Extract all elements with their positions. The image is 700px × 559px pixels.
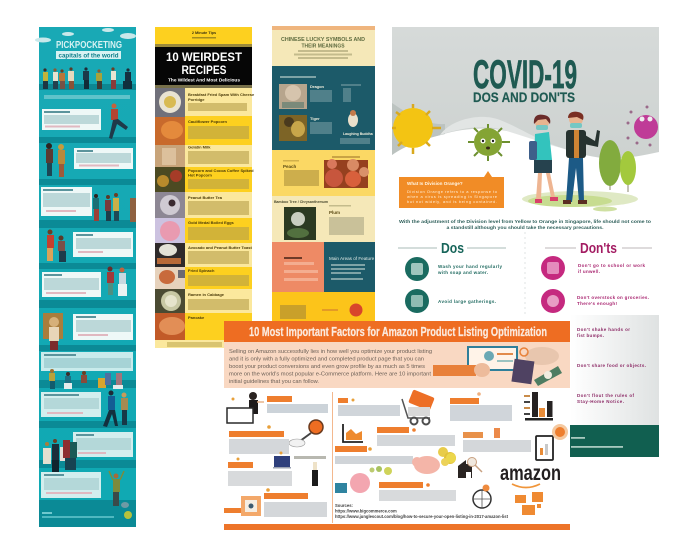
text: groceries: There's enough! xyxy=(577,301,618,306)
card 8 xyxy=(41,392,101,417)
illustration: trees xyxy=(599,140,636,192)
text: avoid gatherings: Avoid large gatherings. xyxy=(438,299,496,304)
figure: pair xyxy=(107,266,127,296)
factor: sales xyxy=(379,482,456,501)
text: groceries: Don't overstock on groceries. xyxy=(577,295,649,300)
text: fist bumps: Don't shake hands or xyxy=(577,327,630,332)
text: stay home: if unwell. xyxy=(578,269,600,274)
recipe headings: Gold Medal Boiled Eggs xyxy=(188,220,235,225)
text: stay-home notice xyxy=(577,393,634,404)
icon: green virus xyxy=(468,124,510,161)
photo: lucky figure xyxy=(348,110,358,127)
figure: couple xyxy=(46,143,65,177)
black title banner xyxy=(155,47,252,88)
factor: magnifier xyxy=(289,420,323,447)
clouds xyxy=(35,28,136,42)
heading: dos xyxy=(398,243,506,253)
icon: orange blocks xyxy=(515,492,543,515)
recipe headings: Cauliflower Popcorn xyxy=(188,119,227,124)
figure: boy xyxy=(563,112,600,204)
card 2 xyxy=(74,148,133,169)
title xyxy=(281,37,365,50)
section: plum: Plum xyxy=(329,210,340,215)
figure: crowd xyxy=(43,439,77,472)
section: plum: Bamboo Tree / Chrysanthemum xyxy=(274,200,328,204)
animal labels xyxy=(310,84,325,121)
text: stay home: Don't go to school or work xyxy=(578,263,645,268)
factor: woman at monitor xyxy=(227,392,328,423)
title: COVID-19: COVID-19 xyxy=(473,53,577,97)
animal labels: Dragon xyxy=(310,84,325,89)
photo: golden statue xyxy=(279,115,307,141)
panel: covid-19 infographic xyxy=(392,27,659,457)
title: THEIR MEANINGS xyxy=(302,44,345,50)
factor: description xyxy=(228,458,292,486)
text: wash hands: with soap and water. xyxy=(437,270,488,275)
text: wash hands: Wash your hand regularly xyxy=(438,264,502,269)
food photos xyxy=(155,88,185,340)
card 3 xyxy=(41,187,92,216)
factor: price xyxy=(338,398,400,416)
icon: shopping cart xyxy=(402,389,435,424)
intro block: boost your product conversions and even grow profile by as much as 5 times xyxy=(229,364,425,370)
title: CHINESE LUCKY SYMBOLS AND xyxy=(281,37,365,43)
factor: inventory xyxy=(335,446,413,464)
recipe headings: Fried Spinach xyxy=(188,268,215,273)
text: stay-home notice: Don't flout the rules of xyxy=(577,393,634,398)
card 10 xyxy=(41,472,101,498)
text: stay home xyxy=(578,264,645,273)
card 4 xyxy=(73,232,133,257)
callout: what is division orange: Division Orange refers to a response to xyxy=(407,189,498,194)
factor: image tile xyxy=(224,496,261,516)
panel: weirdest recipes infographic xyxy=(155,27,255,348)
photo: flowers xyxy=(284,207,316,240)
title: PICKPOCKETING xyxy=(56,40,122,51)
lucky figure label: Laughing Buddha xyxy=(343,132,373,136)
top band: 2 Minute Tips xyxy=(192,31,216,35)
icon: area chart xyxy=(343,424,363,442)
logo: amazon: amazon xyxy=(500,462,561,485)
top strip xyxy=(272,26,375,30)
figure: group xyxy=(93,193,136,222)
factor: description tag xyxy=(450,392,512,421)
icon: pink virus xyxy=(626,106,658,146)
text: wash hands xyxy=(437,264,502,275)
sources: https://www.bigcommerce.com xyxy=(335,508,397,514)
section: yellow footer xyxy=(272,292,375,322)
section: teal animals xyxy=(272,66,375,150)
recipe headings: Hot Popcorn xyxy=(188,172,213,178)
icon: avoid gatherings xyxy=(405,289,429,313)
section: teal panel: Main Areas of Feature xyxy=(329,256,375,261)
text: groceries xyxy=(577,295,649,306)
figure: victim arms raised xyxy=(109,471,129,508)
callout: what is division orange xyxy=(399,171,504,208)
recipe headings xyxy=(188,92,255,320)
photo: dragon statue xyxy=(279,84,307,109)
intro text xyxy=(294,50,352,59)
figure: two men xyxy=(103,390,128,427)
figure: girl xyxy=(529,115,558,203)
intro text xyxy=(44,95,130,99)
sources xyxy=(335,503,509,519)
callout: what is division orange: when a virus is spreading in Singapore xyxy=(407,194,498,199)
text: share food: Don't share food or objects. xyxy=(577,363,646,368)
section: plum xyxy=(274,200,364,240)
recipe headings: Gelatin Milk xyxy=(188,144,211,150)
black title banner: 10 WEIRDEST xyxy=(166,52,242,64)
icon: bar chart xyxy=(524,392,553,420)
sources: https://www.junglescout.com/blog/how-to-secure-your-open-listing-in-2017-amazon-list xyxy=(335,514,509,519)
icon: groceries xyxy=(541,289,565,313)
factor: keywords xyxy=(229,425,289,454)
card 6 xyxy=(73,314,133,340)
intro block: initial guidelines that you can follow. xyxy=(229,379,319,385)
intro text: a standstill although you should take the necessary precautions. xyxy=(446,225,604,230)
recipe headings: Popcorn and Cocoa Coffee Spiked xyxy=(188,168,254,173)
intro text: With the adjustment of the Division level from Yellow to Orange in Singapore, life should not come to xyxy=(399,219,651,224)
icon: globe with pin xyxy=(473,484,491,508)
illustration: analytics and money xyxy=(433,347,562,386)
section: teal panel xyxy=(324,242,375,292)
bottom bar xyxy=(224,524,570,530)
callout: what is division orange: but not widely, and is being contained. xyxy=(407,199,497,204)
icon: wash hands xyxy=(405,257,429,281)
recipe headings: Porridge xyxy=(188,97,205,102)
intro block xyxy=(224,342,570,388)
icon: orange gear xyxy=(552,424,568,440)
list: other animals xyxy=(341,84,361,102)
subtitle: capitals of the world xyxy=(58,54,119,60)
figures row xyxy=(49,369,123,389)
text: stay-home notice: Stay-Home Notice. xyxy=(577,399,624,404)
recipe body text xyxy=(188,103,249,310)
factor: competitive analysis xyxy=(377,427,455,446)
black title banner: RECIPES xyxy=(182,65,227,77)
intro text xyxy=(399,219,651,230)
icon: yellow coin xyxy=(446,453,456,463)
header people xyxy=(39,67,136,90)
footer note xyxy=(167,342,222,347)
recipe headings: Avocado and Peanut Butter Toast xyxy=(188,245,252,250)
factor: laptop xyxy=(273,452,291,468)
section: salmon list xyxy=(272,242,324,292)
heading: dos: Dos xyxy=(441,240,464,257)
text: fist bumps: fist bumps. xyxy=(577,333,604,338)
alternating recipe rows xyxy=(185,116,252,340)
icon: warehouse search xyxy=(458,458,482,478)
card 7 xyxy=(41,352,133,371)
card 5 xyxy=(42,272,101,297)
black title banner: The Wildest And Most Delicious xyxy=(168,78,241,82)
section bands xyxy=(39,137,136,527)
section: peach xyxy=(272,150,375,196)
subtitle xyxy=(56,51,121,60)
section: peach: Peach xyxy=(283,164,297,169)
card 1 xyxy=(42,109,101,130)
header banner: 10 Most Important Factors for Amazon Product Listing Optimization xyxy=(249,325,547,339)
icon: pink pig xyxy=(412,447,456,474)
heading: don'ts xyxy=(545,243,652,253)
divider xyxy=(332,392,334,523)
subtitle: DOS AND DON'TS xyxy=(473,89,575,105)
card 9 xyxy=(73,432,133,457)
animal labels: Tiger xyxy=(310,116,320,121)
sources: Sources: xyxy=(335,503,353,508)
figure: runner xyxy=(109,104,128,139)
figure: pickpocket scene xyxy=(43,313,63,350)
intro block: Selling on Amazon successfully lies in how well you optimize your product listing xyxy=(229,349,432,355)
illustration: ground xyxy=(522,191,638,212)
photo: peaches xyxy=(324,159,369,188)
recipe headings: Ramen in Cabbage xyxy=(188,292,225,297)
heading: don'ts: Don'ts xyxy=(580,240,617,257)
icon: stay home xyxy=(541,256,565,280)
top band xyxy=(155,27,252,47)
footer band xyxy=(570,425,659,457)
footer note xyxy=(42,511,132,519)
text: fist bumps xyxy=(577,327,630,338)
intro block: and it is only with a fully optimized and completed product page that you can xyxy=(229,356,424,362)
panel: amazon listing infographic xyxy=(224,321,570,530)
panel: chinese lucky symbols infographic xyxy=(272,26,375,322)
icon: yellow virus xyxy=(392,104,441,154)
factor: reviews xyxy=(264,488,327,517)
factor: usb and search bar xyxy=(294,456,326,486)
figure: tourists xyxy=(47,230,66,262)
icon: piggy bank and coins xyxy=(335,466,392,493)
recipe headings: Breakfast Fried Spam With Cheese xyxy=(188,92,255,97)
recipe headings: Peanut Butter Tea xyxy=(188,195,223,200)
factor: backend keywords xyxy=(463,428,531,452)
callout: what is division orange: What Is Division Orange? xyxy=(407,181,463,186)
icon: document report xyxy=(536,436,553,460)
intro block: more on the world's most popular e-Commerce platform. Here are 10 important xyxy=(229,372,431,378)
panel: pickpocketing infographic xyxy=(35,27,136,527)
header banner xyxy=(224,321,570,342)
recipe headings: Pancake xyxy=(188,315,205,320)
